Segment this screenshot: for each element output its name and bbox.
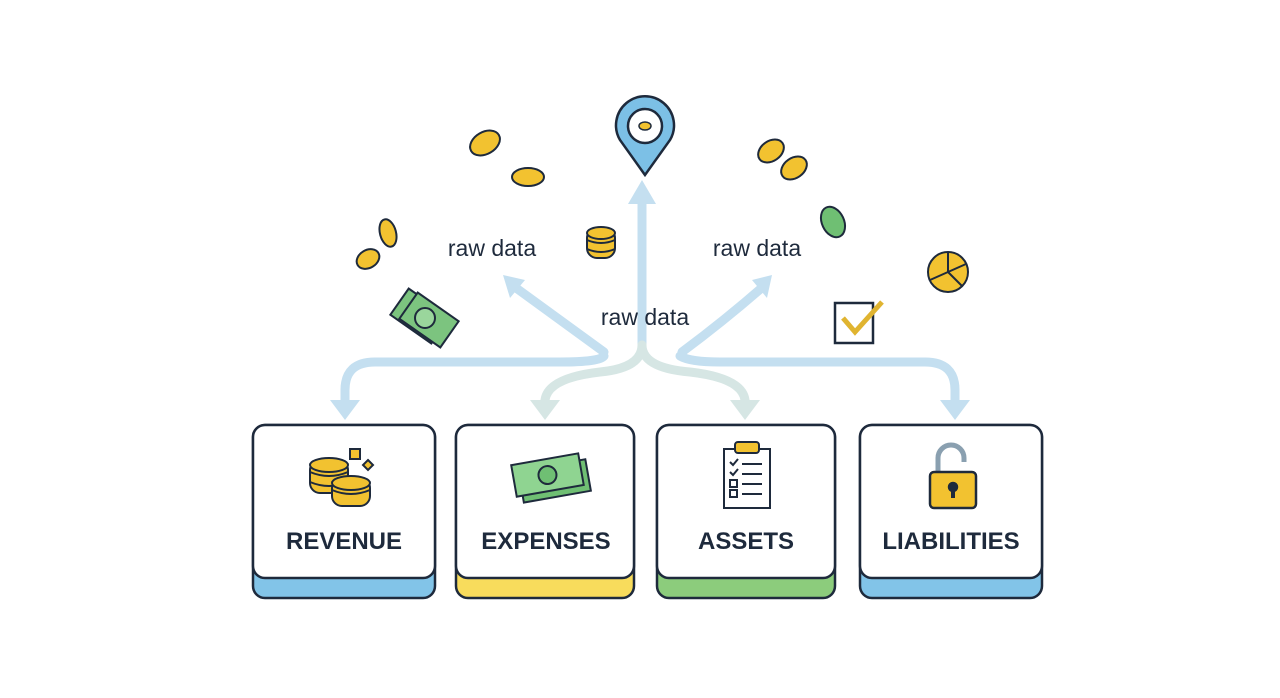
card: ASSETS: [657, 425, 835, 598]
arrowheads: [330, 180, 970, 420]
card: REVENUE: [253, 425, 435, 598]
icon: checkbox: [835, 302, 882, 343]
card: REVENUE: REVENUE: [286, 528, 402, 555]
icon: cash stack floating: [390, 289, 459, 347]
icon: open padlock: [930, 445, 976, 508]
icon: coin stacks: [310, 449, 373, 506]
icon: location pin: [616, 96, 674, 175]
label: raw data right: raw data: [713, 235, 801, 261]
label: raw data left: raw data: [448, 235, 536, 261]
card: ASSETS: ASSETS: [698, 528, 794, 555]
card: EXPENSES: EXPENSES: [481, 528, 611, 555]
icon: clipboard: [724, 442, 770, 508]
card: LIABILITIES: [860, 425, 1042, 598]
card: EXPENSES: [456, 425, 634, 598]
label: raw data center: raw data: [601, 304, 689, 330]
card: LIABILITIES: LIABILITIES: [882, 528, 1020, 555]
icon: banknotes: [511, 452, 591, 504]
icons: floating coins: [353, 125, 968, 292]
arrows: data flow: [345, 200, 955, 402]
